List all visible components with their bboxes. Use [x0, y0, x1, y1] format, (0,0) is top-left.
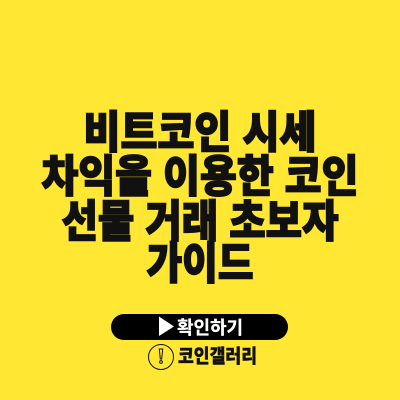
title: 선물 거래 초보자: [62, 198, 338, 246]
button label: 확인하기: [177, 318, 243, 338]
title: 가이드: [146, 240, 254, 288]
icon: play triangle: [159, 316, 174, 336]
button: confirm: [111, 314, 288, 340]
icon: exclamation circle: [148, 344, 174, 370]
title: [42, 108, 358, 288]
title: 차익을 이용한 코인: [42, 152, 358, 202]
title: 비트코인 시세: [84, 108, 316, 158]
brand name: 코인갤러리: [178, 346, 257, 368]
